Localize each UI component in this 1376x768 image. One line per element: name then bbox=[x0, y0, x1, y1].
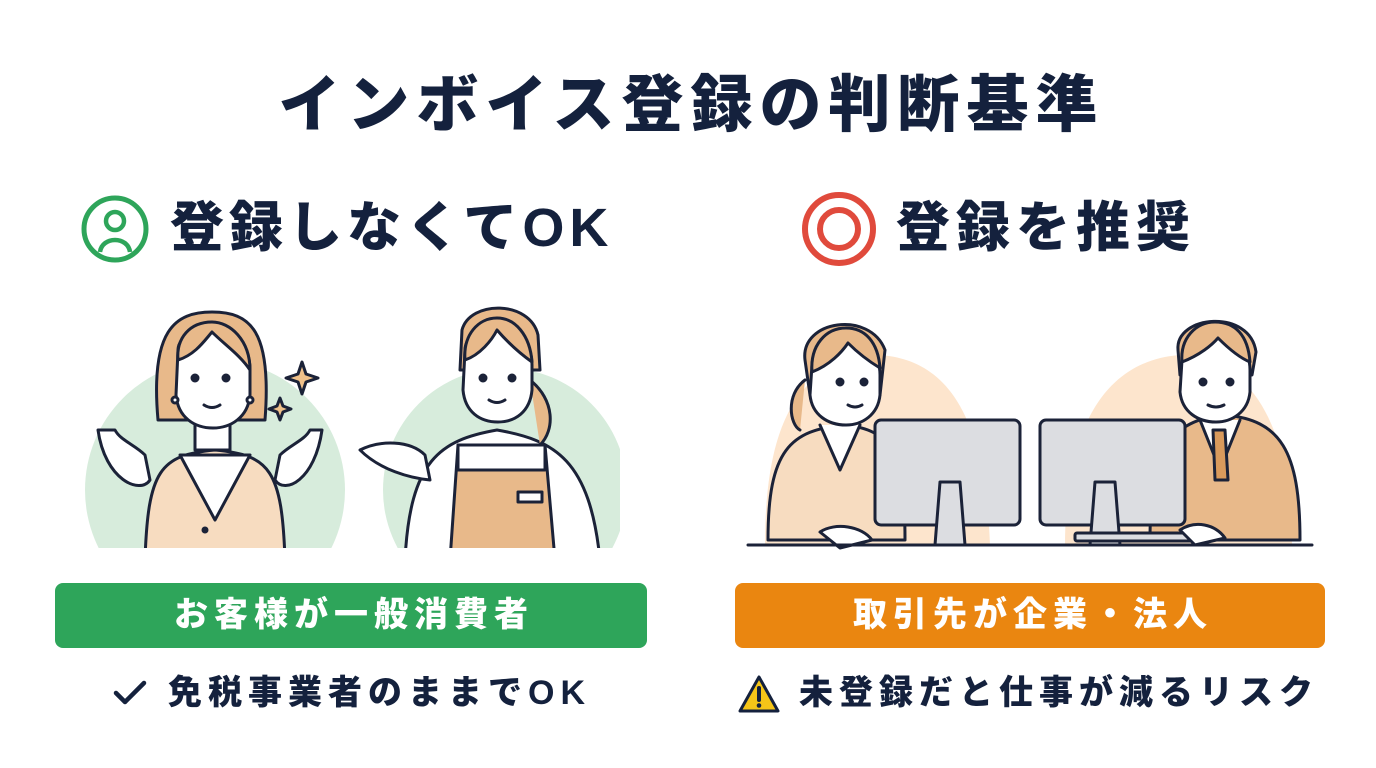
note: risk: 未登録だと仕事が減るリスク bbox=[799, 674, 1319, 712]
heading: not needed: 登録しなくてOK bbox=[170, 198, 613, 258]
icon: check bbox=[114, 680, 146, 704]
banner: consumers bbox=[55, 583, 647, 648]
woman 2 (apron) bbox=[405, 430, 600, 560]
icon: person circle bbox=[82, 196, 148, 262]
icon: warning bbox=[738, 675, 780, 712]
illustration: consumers bbox=[85, 306, 620, 548]
banner: business: 取引先が企業・法人 bbox=[853, 596, 1213, 634]
monitor 2 bbox=[1040, 420, 1185, 525]
heading: recommended: 登録を推奨 bbox=[896, 198, 1196, 258]
monitor 1 bbox=[875, 420, 1020, 525]
icon: target bbox=[802, 192, 876, 266]
title: インボイス登録の判断基準 bbox=[278, 71, 1105, 140]
illustration: business people bbox=[746, 320, 1314, 550]
banner: business bbox=[735, 583, 1325, 648]
note: stay tax-exempt: 免税事業者のままでOK bbox=[168, 674, 591, 712]
heading: recommended bbox=[802, 192, 1196, 266]
woman at pc bbox=[768, 425, 905, 540]
woman 1 bbox=[144, 450, 286, 548]
man at pc bbox=[1150, 415, 1300, 540]
banner: consumers: お客様が一般消費者 bbox=[174, 596, 534, 634]
